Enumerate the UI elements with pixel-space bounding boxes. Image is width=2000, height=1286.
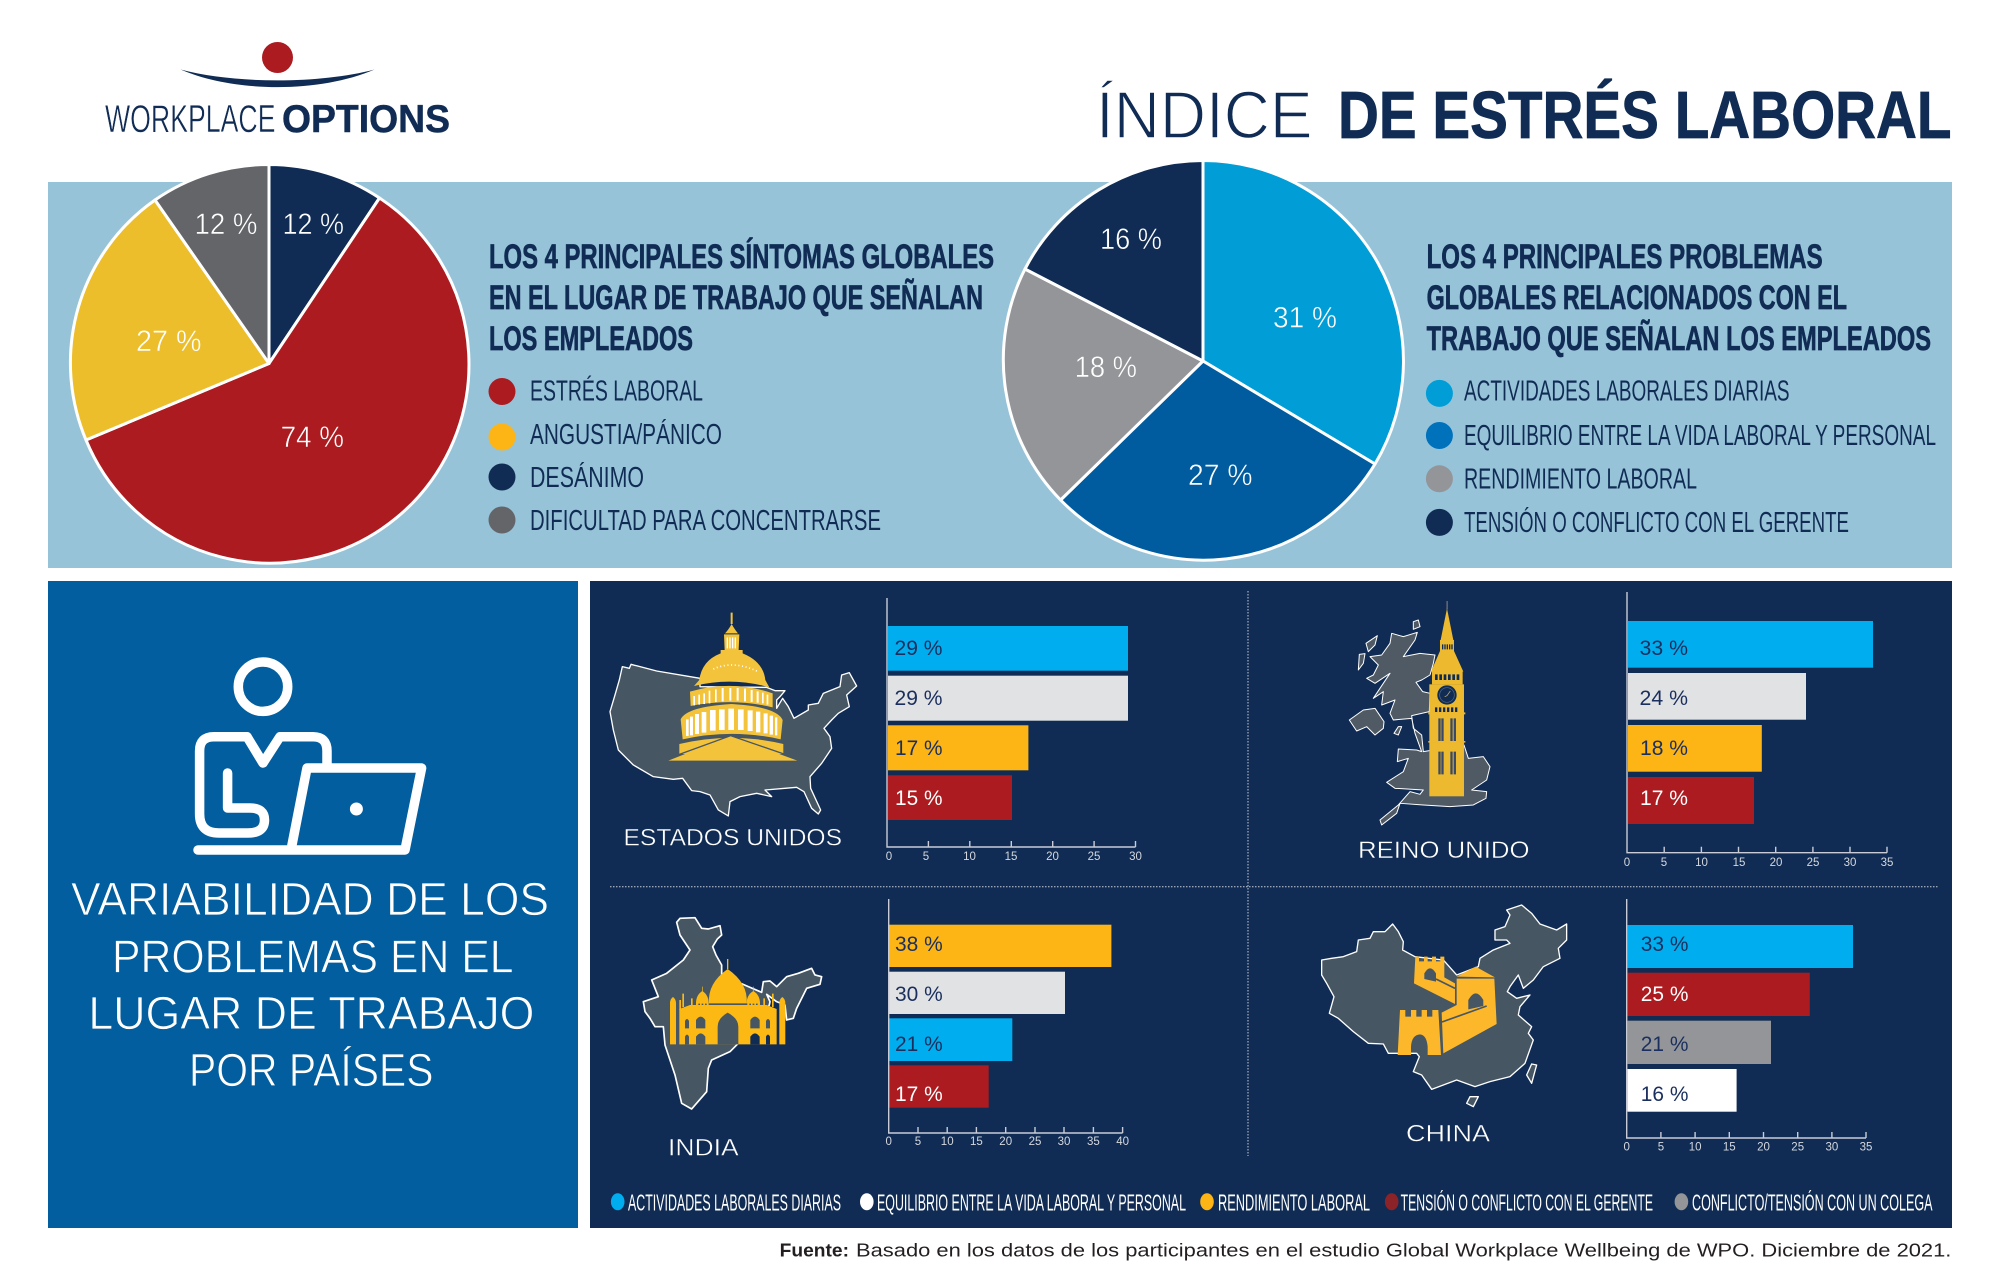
bar chart: China: 0 [1623, 1142, 1630, 1154]
bar chart: Estados Unidos: 29 % [894, 686, 942, 710]
bar chart: Estados Unidos: 15 [1005, 851, 1017, 863]
bar chart: China: 25 [1791, 1142, 1804, 1154]
bar chart: Reino Unido: 10 [1695, 857, 1708, 869]
bar chart: Estados Unidos: 30 [1129, 851, 1142, 863]
legend: countries: ACTIVIDADES LABORALES DIARIAS [628, 1190, 841, 1216]
country: United Kingdom [1349, 592, 1893, 869]
bar chart: Reino Unido: 30 [1844, 857, 1856, 869]
bar chart: India: 25 [1029, 1136, 1041, 1148]
bar chart: Estados Unidos: 17 % [895, 736, 942, 760]
logo mark [180, 42, 374, 87]
bar chart: India: 10 [941, 1136, 954, 1148]
heading: symptoms [489, 238, 994, 358]
bar chart: China: 15 [1723, 1142, 1736, 1154]
country: India [643, 899, 1129, 1162]
pie chart: problems: 16 % [1100, 223, 1162, 256]
bar chart: India: 15 [970, 1136, 983, 1148]
bar chart: India: 40 [1116, 1136, 1129, 1148]
bar chart: Reino Unido: 33 % [1640, 636, 1688, 660]
source note: Fuente: [780, 1241, 849, 1261]
heading: symptoms: LOS 4 PRINCIPALES SÍNTOMAS GLOBALES [489, 238, 994, 276]
pie chart: symptoms: 12 % [194, 208, 258, 241]
bar chart: Estados Unidos: 10 [963, 851, 976, 863]
legend: symptoms [488, 375, 881, 537]
bar chart: China: 35 [1860, 1142, 1872, 1154]
bar chart: Estados Unidos: 15 % [895, 786, 942, 810]
legend: problems: RENDIMIENTO LABORAL [1464, 464, 1697, 496]
bar chart: Reino Unido: 25 [1807, 857, 1819, 869]
source note: Basado en los datos de los participantes en el estudio Global Workplace Wellbeing de WPO. Diciembre de 2021. [856, 1241, 1951, 1261]
pie chart: problems: 18 % [1075, 351, 1137, 384]
bar chart: Estados Unidos: 29 % [894, 636, 942, 660]
logo wordmark: WORKPLACE [105, 98, 276, 141]
label: Reino Unido: REINO UNIDO [1358, 837, 1530, 864]
map and capitol icon [610, 613, 857, 816]
bar chart: Estados Unidos: 0 [886, 851, 892, 863]
legend: countries: TENSIÓN O CONFLICTO CON EL GERENTE [1401, 1190, 1653, 1216]
pie chart: symptoms: 12 % [282, 208, 344, 241]
label: Estados Unidos: ESTADOS UNIDOS [624, 825, 842, 852]
heading: problems: LOS 4 PRINCIPALES PROBLEMAS [1427, 238, 1823, 276]
bar chart: India: 17 % [895, 1082, 943, 1106]
legend: countries: EQUILIBRIO ENTRE LA VIDA LABORAL Y PERSONAL [877, 1190, 1186, 1216]
bar chart: Reino Unido: 24 % [1640, 686, 1688, 710]
bar chart: India: 30 % [895, 982, 943, 1006]
title [1096, 78, 1952, 153]
legend: countries: RENDIMIENTO LABORAL [1218, 1190, 1370, 1216]
bar chart: Reino Unido [1624, 592, 1893, 869]
legend: symptoms: DIFICULTAD PARA CONCENTRARSE [530, 505, 881, 537]
pie chart: symptoms: 74 % [281, 421, 344, 454]
bar chart: China [1623, 899, 1872, 1154]
bar chart: India: 30 [1058, 1136, 1070, 1148]
title: ÍNDICE [1096, 78, 1312, 153]
heading: variability [71, 873, 549, 1096]
bar chart: Reino Unido: 20 [1770, 857, 1782, 869]
legend: symptoms: DESÁNIMO [530, 461, 644, 494]
pie chart: problems: 31 % [1273, 302, 1337, 335]
bar chart: Reino Unido: 15 [1733, 857, 1745, 869]
logo wordmark: OPTIONS [282, 98, 450, 141]
bar chart: China: 10 [1689, 1142, 1701, 1154]
panel: variability [48, 581, 578, 1228]
panel: global top 4 [48, 182, 1952, 568]
label: India: INDIA [668, 1135, 739, 1162]
heading: symptoms: LOS EMPLEADOS [489, 320, 693, 358]
legend: symptoms: ESTRÉS LABORAL [530, 375, 703, 408]
bar chart: India: 38 % [895, 932, 943, 956]
bar chart: Reino Unido: 18 % [1640, 736, 1688, 760]
country: China [1322, 899, 1872, 1154]
bar chart: India: 21 % [895, 1032, 943, 1056]
bar chart: China: 33 % [1641, 932, 1688, 956]
heading: symptoms: EN EL LUGAR DE TRABAJO QUE SEÑALAN [489, 279, 983, 317]
bar chart: Reino Unido: 0 [1624, 857, 1630, 869]
legend: symptoms: ANGUSTIA/PÁNICO [530, 418, 722, 451]
bar chart: Estados Unidos: 20 [1046, 851, 1059, 863]
pie chart: symptoms [70, 164, 469, 563]
heading: variability: POR PAÍSES [189, 1044, 434, 1096]
heading: problems [1427, 238, 1931, 358]
bar chart: Estados Unidos: 5 [923, 851, 929, 863]
icon: person at laptop [198, 662, 422, 850]
panel: countries [590, 581, 1952, 1228]
heading: variability: LUGAR DE TRABAJO [88, 987, 534, 1039]
bar chart: Estados Unidos: 25 [1088, 851, 1100, 863]
label: China: CHINA [1406, 1121, 1490, 1148]
bar chart: China: 20 [1757, 1142, 1770, 1154]
map and Big Ben icon [1349, 601, 1490, 825]
bar chart: China: 30 [1826, 1142, 1838, 1154]
bar chart: India: 0 [885, 1136, 892, 1148]
bar chart: China: 21 % [1641, 1032, 1688, 1056]
logo: Workplace Options [105, 42, 450, 141]
heading: variability: PROBLEMAS EN EL [112, 931, 514, 983]
bar chart: Reino Unido: 17 % [1640, 786, 1688, 810]
pie chart: problems [1003, 160, 1403, 560]
bar chart: India: 5 [915, 1136, 921, 1148]
bar chart: China: 16 % [1641, 1082, 1688, 1106]
map and Taj Mahal icon [643, 918, 822, 1109]
bar chart: China: 5 [1658, 1142, 1664, 1154]
legend: problems [1426, 376, 1936, 539]
pie chart: problems: 27 % [1188, 459, 1252, 492]
bar chart: India [885, 899, 1129, 1148]
bar chart: China: 25 % [1641, 982, 1688, 1006]
bar chart: India: 20 [999, 1136, 1012, 1148]
heading: variability: VARIABILIDAD DE LOS [71, 873, 549, 925]
bar chart: India: 35 [1087, 1136, 1100, 1148]
bar chart: Estados Unidos [886, 598, 1142, 863]
map and Great Wall icon [1322, 905, 1567, 1107]
bar chart: Reino Unido: 5 [1661, 857, 1667, 869]
pie chart: symptoms: 27 % [136, 325, 202, 358]
legend: countries [611, 1190, 1933, 1216]
country: United States [610, 598, 1142, 863]
bar chart: Reino Unido: 35 [1881, 857, 1893, 869]
legend: problems: ACTIVIDADES LABORALES DIARIAS [1464, 376, 1790, 408]
